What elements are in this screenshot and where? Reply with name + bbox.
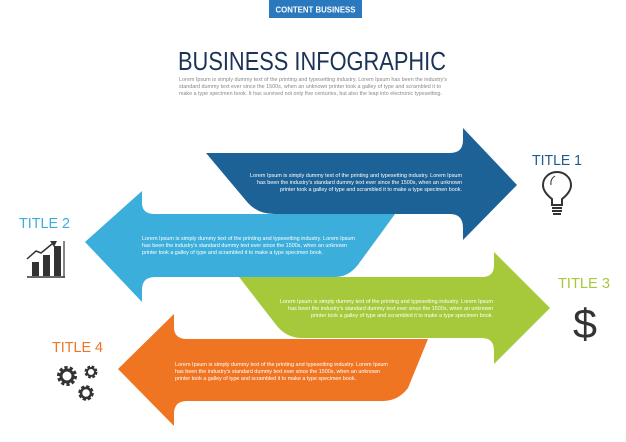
arrow 2: light blue left: Lorem Ipsum is simply dummy text of the printing and typesetting industry. Lorem Ipsum — [142, 236, 355, 242]
arrow 4: orange left: printer took a galley of type and scrambled it to make a type specimen book. — [175, 376, 356, 382]
arrow 1: dark blue right: has been the industry's standard dummy text ever since the 1500s, when an unknown — [257, 180, 462, 186]
icon: dollar: $ — [573, 300, 597, 347]
arrow 3: green right: Lorem Ipsum is simply dummy text of the printing and typesetting industry. Lorem Ipsum — [280, 299, 493, 305]
title 3: TITLE 3 — [558, 275, 610, 292]
arrow 2: light blue left: has been the industry's standard dummy text ever since the 1500s, when an unknown — [142, 243, 347, 249]
icon: bar chart — [27, 241, 65, 277]
arrow 1: dark blue right: Lorem Ipsum is simply dummy text of the printing and typesetting industry. Lorem Ipsum — [250, 173, 462, 179]
arrow 1: dark blue right — [206, 128, 517, 240]
title 2: TITLE 2 — [19, 215, 70, 232]
title: BUSINESS INFOGRAPHIC — [178, 46, 446, 76]
arrow 4: orange left: has been the industry's standard dummy text ever since the 1500s, when an unknown — [175, 369, 380, 375]
arrow 1: dark blue right: printer took a galley of type and scrambled it to make a type specimen book. — [280, 187, 462, 193]
header badge: CONTENT BUSINESS — [276, 4, 356, 14]
arrow 3: green right: has been the industry's standard dummy text ever since the 1500s, when an unknown — [288, 306, 493, 312]
icon: light bulb — [543, 172, 571, 214]
intro text: make a type specimen book. It has survived not only five centuries, but also the leap into electronic typesetting. — [179, 91, 442, 97]
arrow 3: green right: printer took a galley of type and scrambled it to make a type specimen book. — [311, 313, 493, 319]
title 4: TITLE 4 — [52, 339, 103, 356]
intro text: standard dummy text ever since the 1500s, when an unknown printer took a galley of type and scrambled it to — [179, 84, 441, 90]
header badge — [269, 0, 362, 18]
icon: gears — [59, 367, 96, 399]
arrow 2: light blue left: printer took a galley of type and scrambled it to make a type specimen book. — [142, 250, 323, 256]
intro text: Lorem Ipsum is simply dummy text of the printing and typesetting industry. Lorem Ipsum has been the industry's — [179, 77, 448, 83]
arrow 3: green right — [239, 252, 550, 364]
arrow 2: light blue left — [85, 191, 395, 302]
arrow 4: orange left — [118, 314, 428, 426]
title 1: TITLE 1 — [532, 152, 582, 169]
intro text — [179, 77, 448, 97]
arrow 4: orange left: Lorem Ipsum is simply dummy text of the printing and typesetting industry. Lorem Ipsum — [175, 362, 388, 368]
